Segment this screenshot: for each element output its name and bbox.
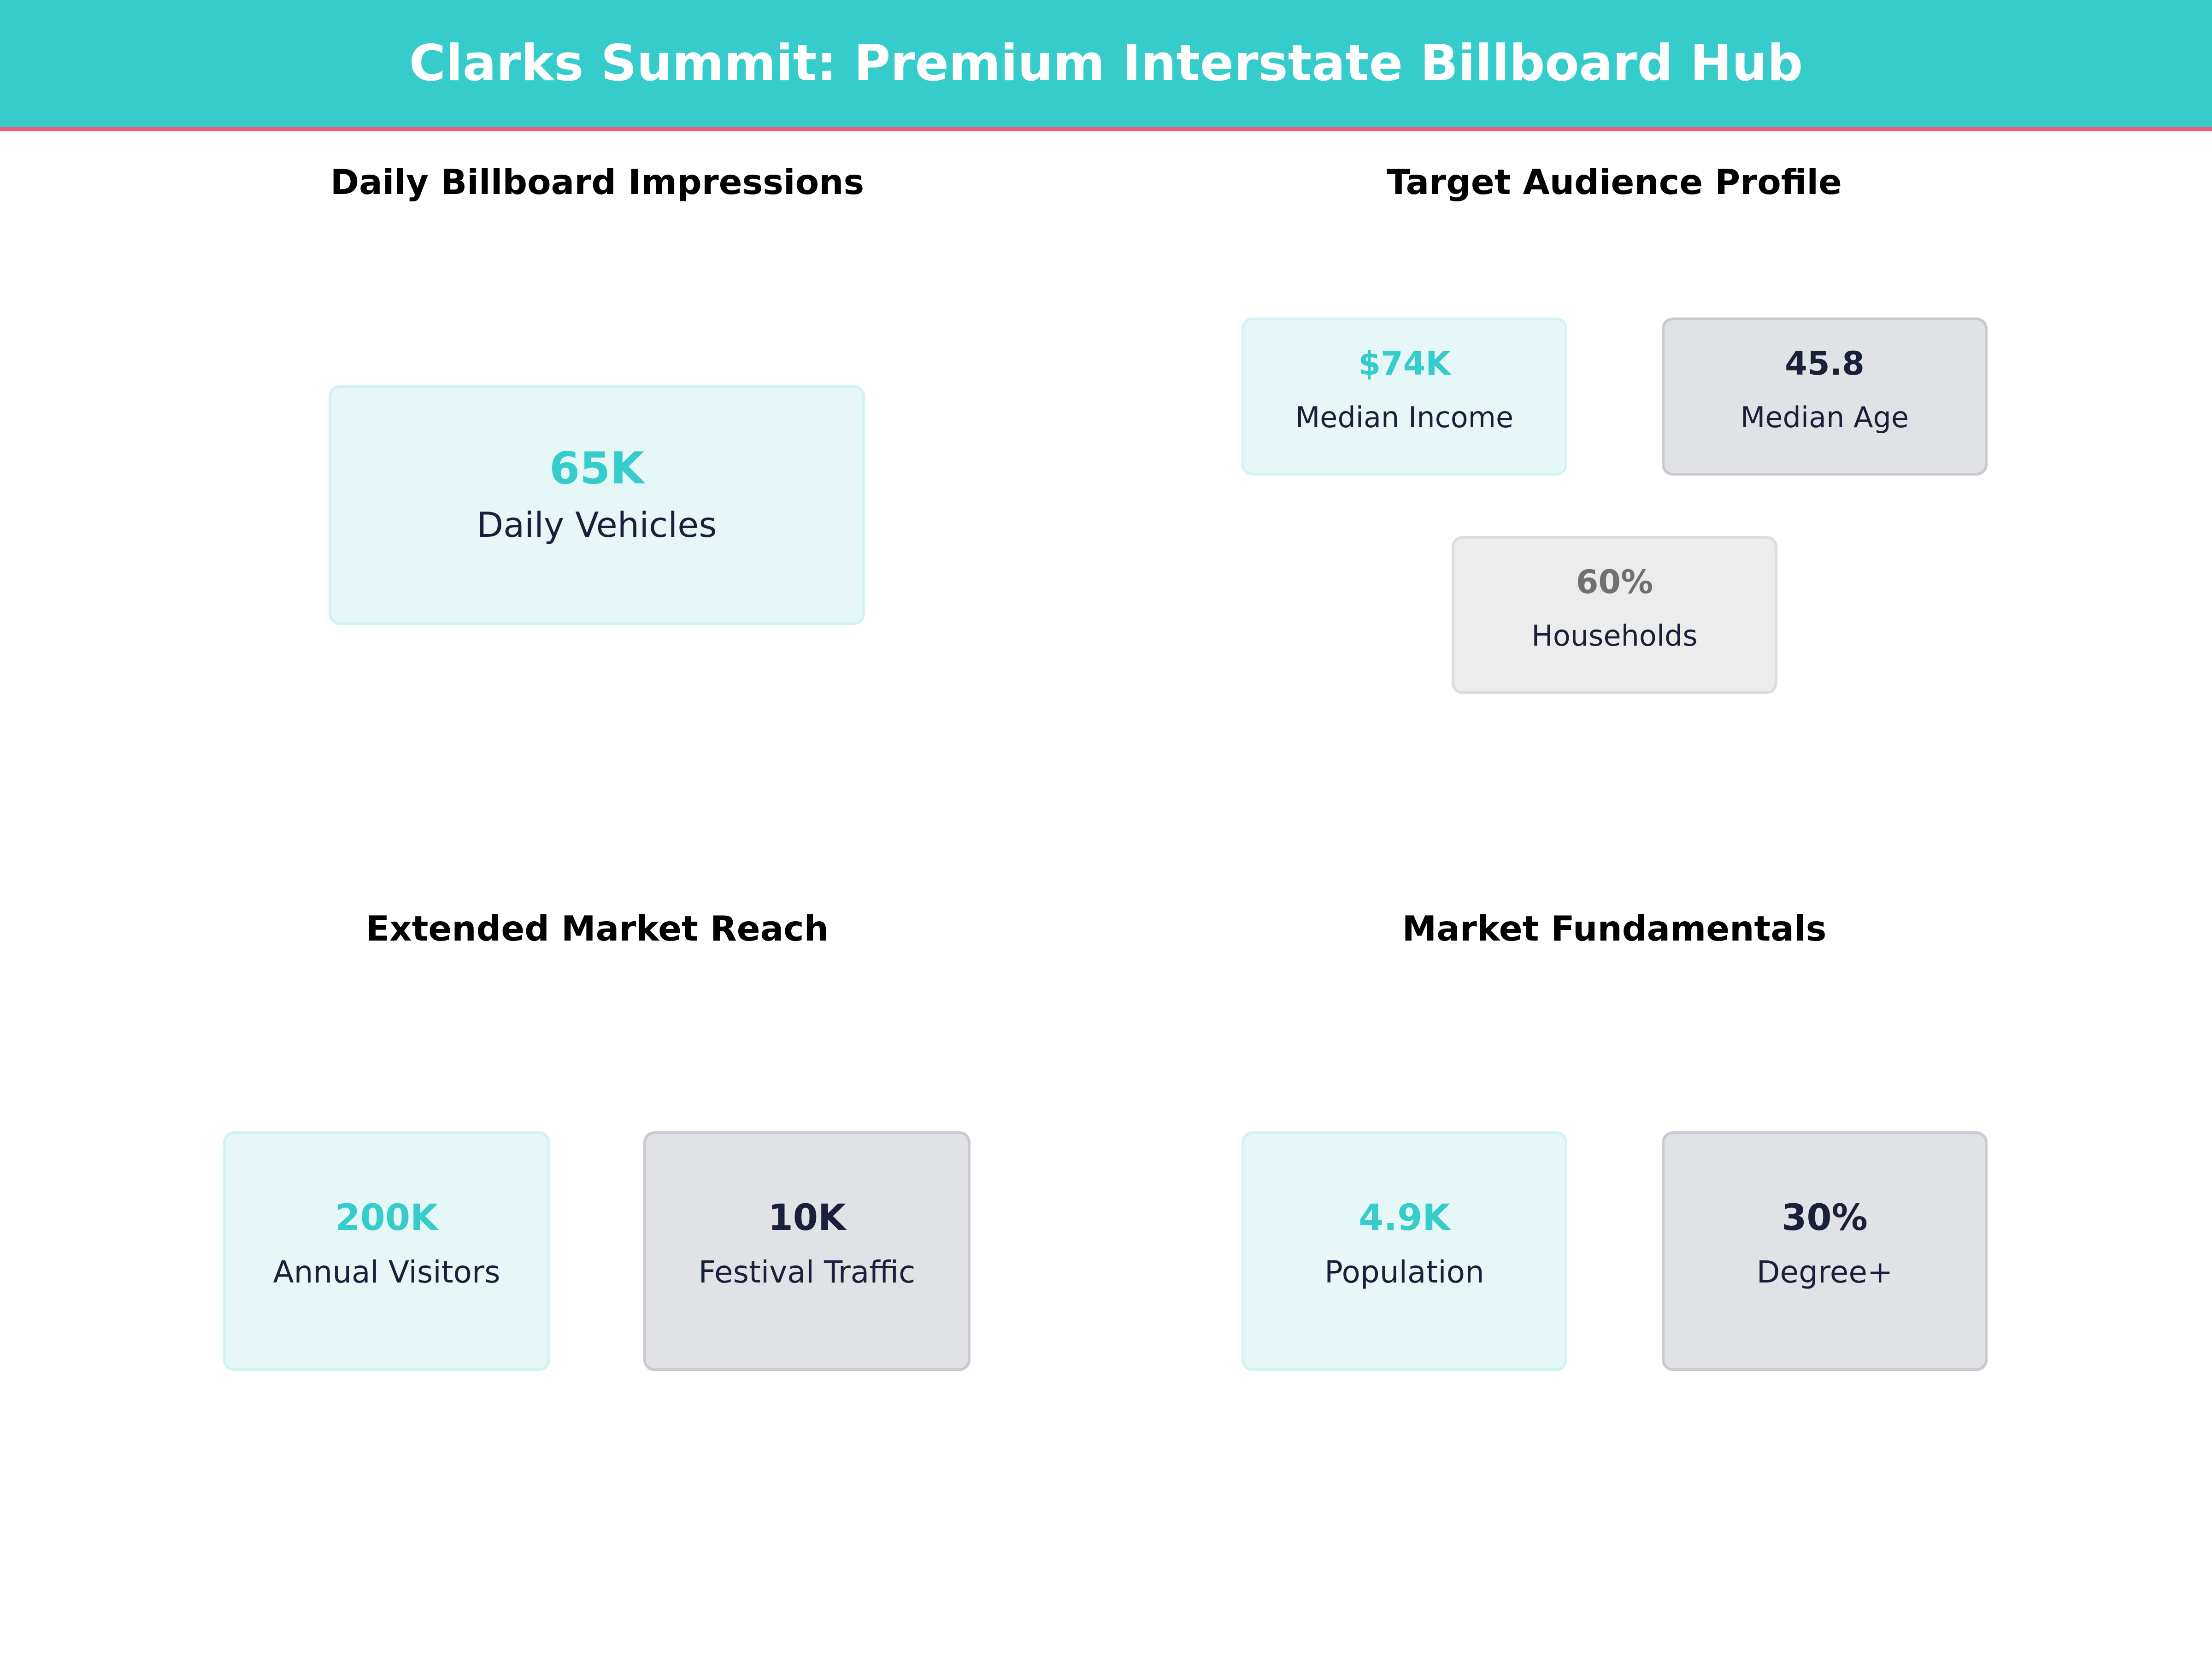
card: degree: Degree+ (1757, 1254, 1893, 1290)
header banner (0, 0, 2212, 131)
card: households (1452, 536, 1777, 694)
header banner: Clarks Summit: Premium Interstate Billboard Hub (409, 35, 1803, 92)
card: population (1241, 1131, 1567, 1371)
card: degree: 30% (1782, 1197, 1868, 1239)
card: daily vehicles: 65K (549, 443, 644, 494)
heading: Target Audience Profile: Target Audience Profile (1387, 162, 1842, 202)
card: festival traffic (643, 1131, 971, 1371)
card: median age: Median Age (1741, 400, 1909, 434)
card: daily vehicles (329, 385, 865, 625)
heading: Market Fundamentals: Market Fundamentals (1402, 908, 1826, 949)
card: median income (1241, 318, 1567, 476)
card: degree (1662, 1131, 1988, 1371)
card: households: Households (1531, 619, 1698, 653)
card: population: Population (1324, 1254, 1484, 1290)
card: median age (1662, 318, 1988, 476)
card: festival traffic: 10K (768, 1197, 846, 1239)
card: festival traffic: Festival Traffic (699, 1254, 915, 1290)
card: population: 4.9K (1359, 1197, 1450, 1239)
card: annual visitors: 200K (335, 1197, 438, 1239)
card: households: 60% (1576, 563, 1653, 601)
heading: Extended Market Reach: Extended Market Reach (366, 908, 829, 949)
card: median income: $74K (1358, 345, 1451, 382)
card: median income: Median Income (1295, 400, 1513, 434)
card: annual visitors: Annual Visitors (273, 1254, 500, 1290)
card: median age: 45.8 (1785, 345, 1865, 382)
card: daily vehicles: Daily Vehicles (477, 505, 717, 545)
card: annual visitors (223, 1131, 550, 1371)
heading: Daily Billboard Impressions: Daily Billboard Impressions (330, 162, 864, 202)
